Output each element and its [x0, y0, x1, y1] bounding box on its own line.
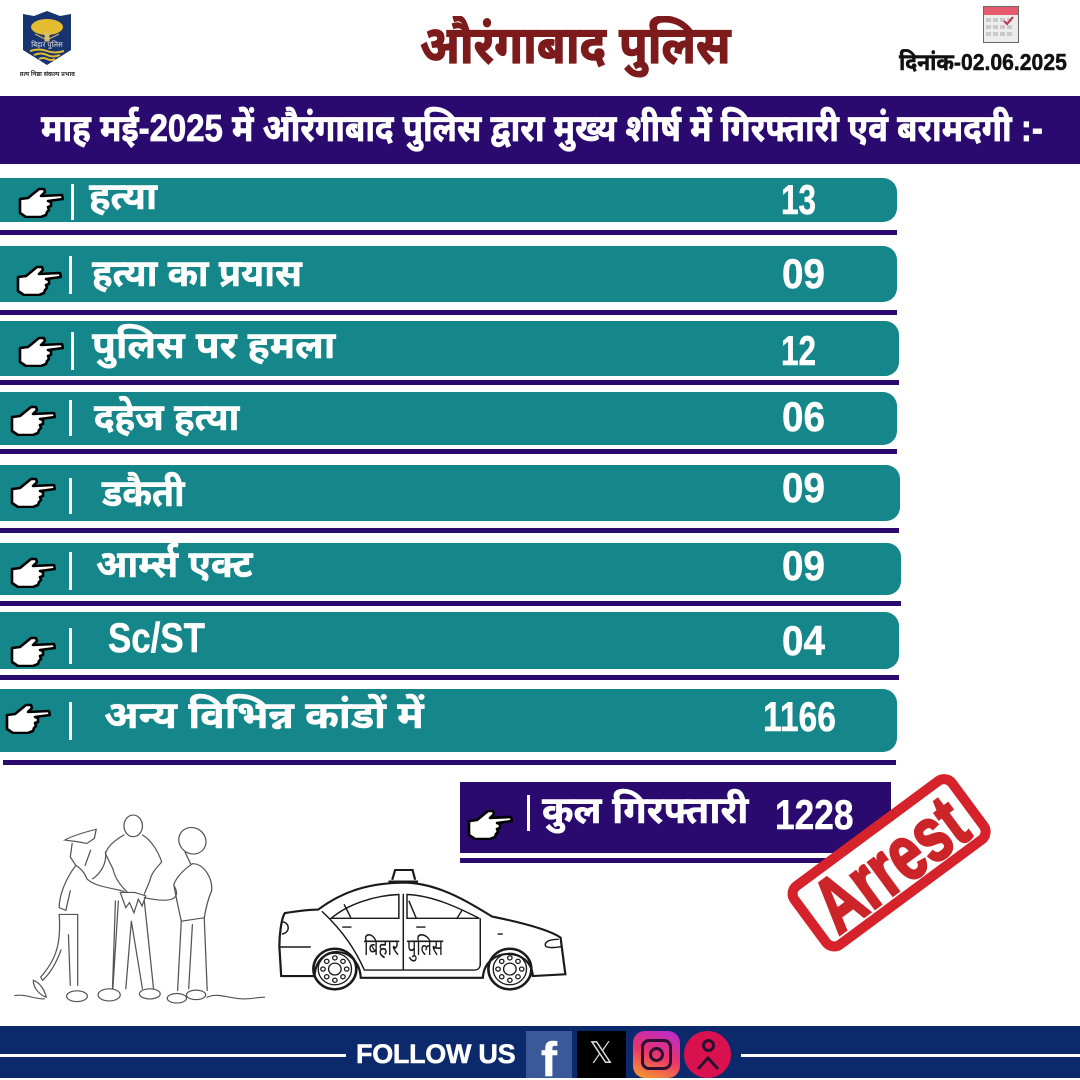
logo: Bihar Police badge: बिहार पुलिस — [31, 41, 63, 49]
heading banner — [0, 96, 1080, 164]
total arrests panel: कुल गिरफ्तारी — [542, 790, 748, 832]
icon: facebook — [526, 1031, 572, 1078]
row: हत्या का प्रयास: 09 — [782, 250, 825, 297]
total arrests panel — [460, 782, 891, 863]
illustration: police officers arresting a man — [14, 814, 266, 1004]
row: आर्म्स एक्ट: 09 — [782, 542, 825, 589]
row: हत्या: हत्या — [89, 176, 157, 218]
icon: X — [577, 1031, 626, 1078]
row: अन्य विभिन्न कांडों में: 1166 — [763, 693, 836, 740]
illustration: Bihar Police car: बिहार — [364, 934, 399, 960]
date: दिनांक-02.06.2025 — [899, 49, 1067, 75]
row: डकैती: 09 — [782, 464, 825, 511]
row: Sc/ST: 04 — [782, 617, 825, 664]
row: Sc/ST: Sc/ST — [108, 614, 205, 661]
heading banner: माह मई-2025 में औरंगाबाद पुलिस द्वारा मुख्य शीर्ष में गिरफ्तारी एवं बरामदगी :- — [41, 108, 1043, 150]
row: पुलिस पर हमला: पुलिस पर हमला — [92, 325, 335, 367]
footer: follow us bar: FOLLOW US — [356, 1039, 515, 1069]
total arrests panel: 1228 — [775, 791, 853, 838]
icon: instagram — [633, 1031, 680, 1078]
icon: X: 𝕏 — [589, 1037, 613, 1070]
row: दहेज हत्या: दहेज हत्या — [94, 397, 239, 439]
row: आर्म्स एक्ट: आर्म्स एक्ट — [96, 544, 253, 586]
logo: Bihar Police badge — [20, 11, 75, 78]
logo: Bihar Police badge: सत्य निष्ठा संकल्प प्रभाव — [20, 70, 75, 78]
row: हत्या: 13 — [781, 176, 816, 223]
row: अन्य विभिन्न कांडों में: अन्य विभिन्न कांडों में — [104, 695, 424, 737]
row: पुलिस पर हमला: 12 — [781, 327, 816, 374]
icon: calendar — [983, 6, 1019, 43]
row: डकैती: डकैती — [102, 473, 185, 515]
title: औरंगाबाद पुलिस — [420, 17, 731, 75]
illustration: Bihar Police car — [278, 869, 567, 991]
icon: koo — [684, 1031, 731, 1078]
footer: follow us bar — [0, 1026, 1080, 1078]
row: दहेज हत्या: 06 — [782, 393, 825, 440]
illustration: Bihar Police car: पुलिस — [407, 934, 443, 962]
row: हत्या का प्रयास: हत्या का प्रयास — [92, 253, 302, 295]
